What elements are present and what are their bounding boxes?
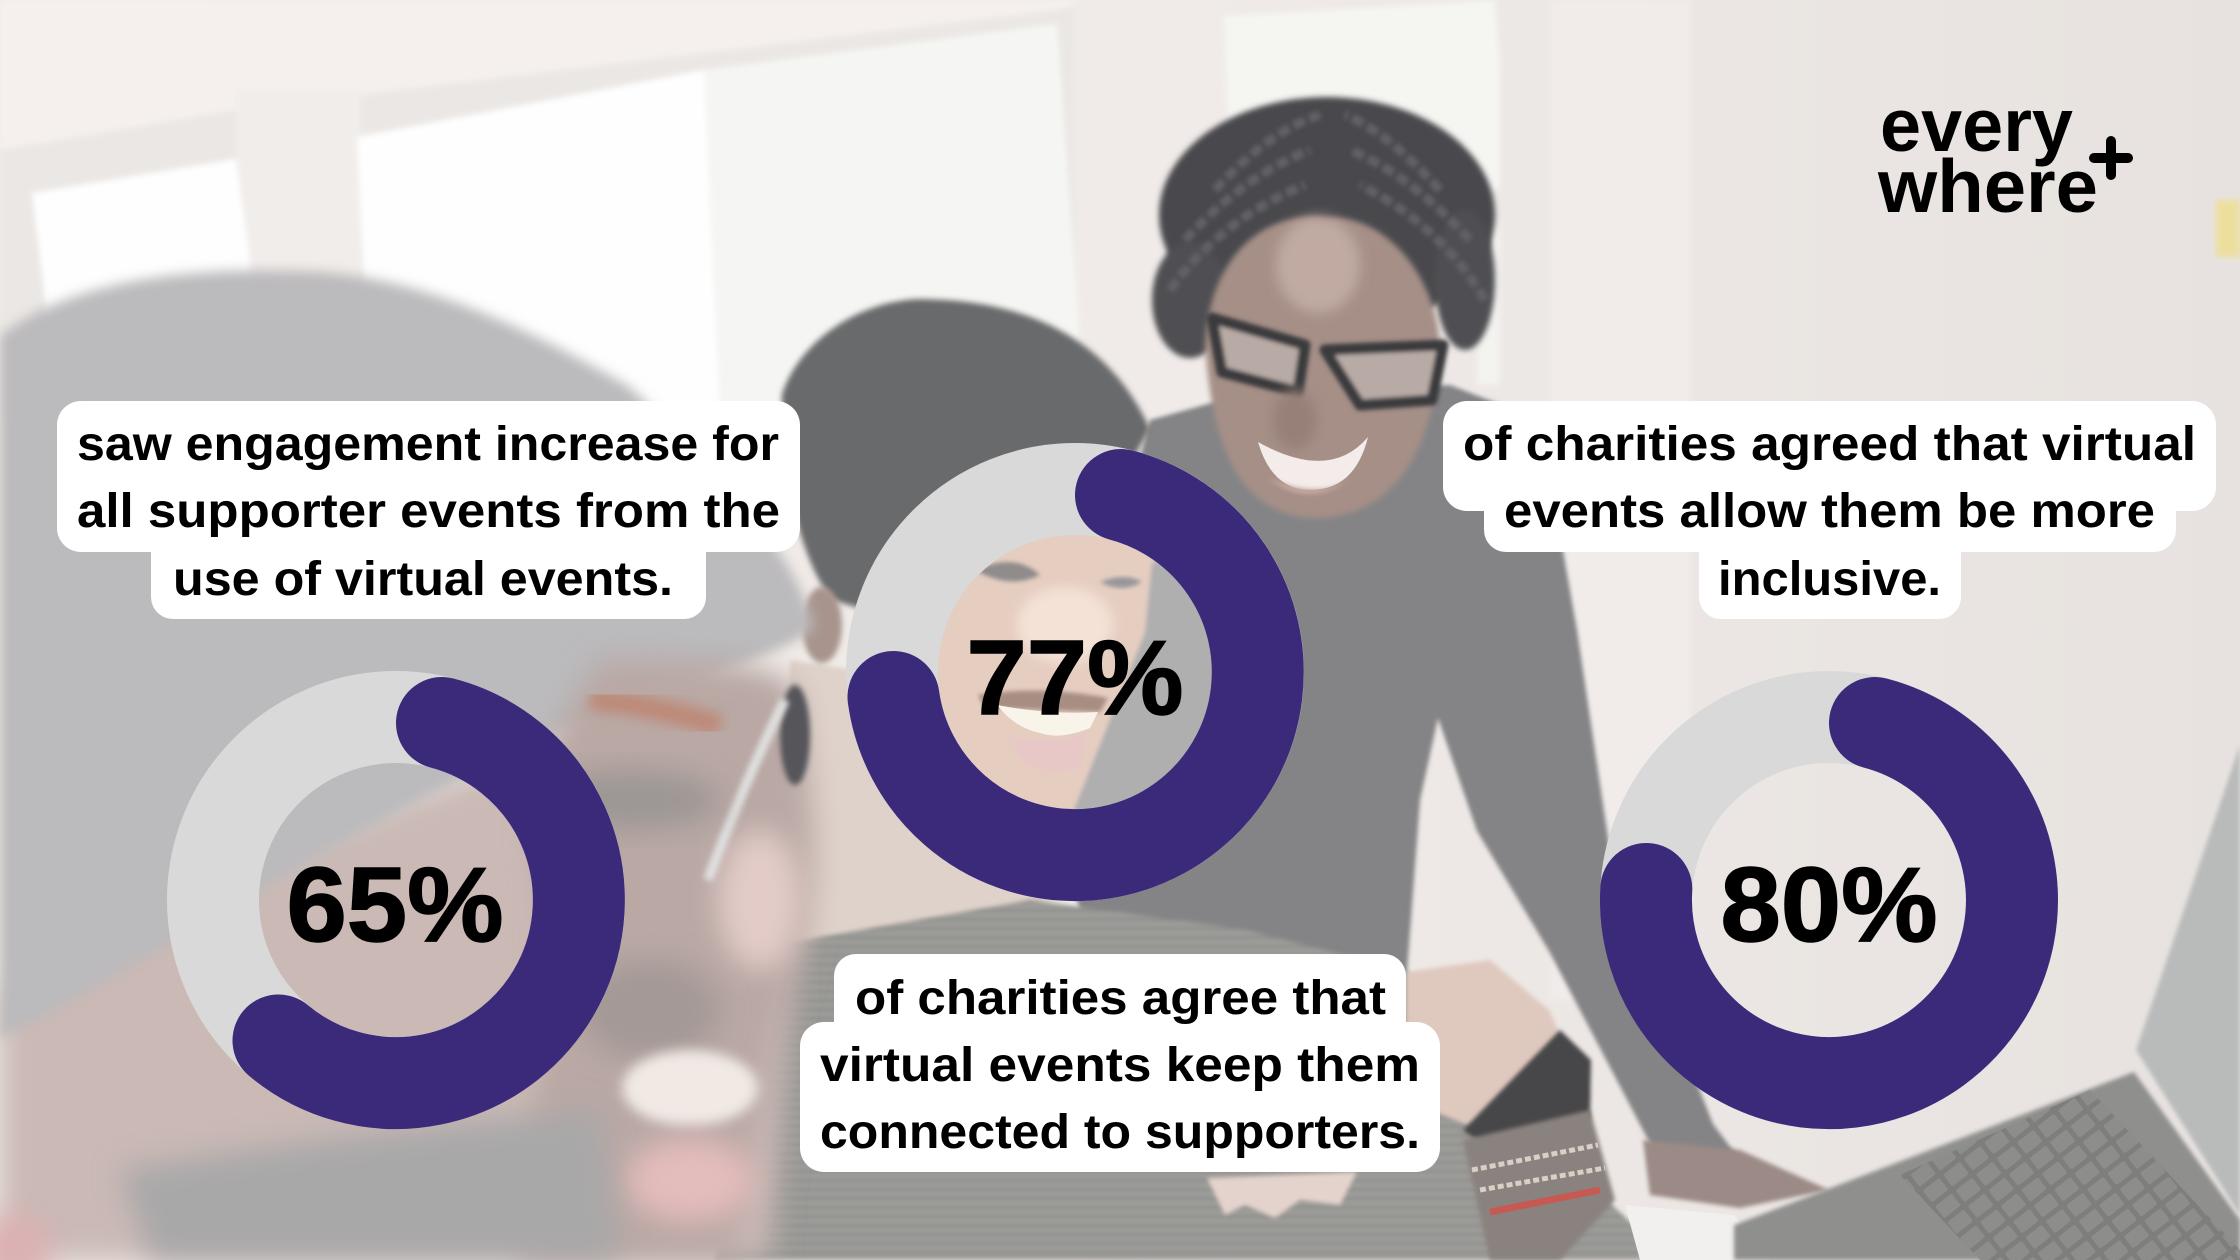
logo: everywhere+: where: [1877, 144, 2098, 228]
hair: [1159, 97, 1495, 333]
face: [0, 690, 789, 1260]
sweater and arm: [1050, 385, 1740, 1172]
ceiling and window frames: [0, 0, 2240, 1000]
callout: engagement: saw engagement increase for: [77, 418, 779, 471]
beanie: [0, 271, 814, 1040]
person: left man with beanie, blurred in the foreground: [0, 271, 814, 1260]
logo: everywhere+: [1877, 83, 2128, 228]
callout: inclusive: events allow them be more: [1504, 485, 2155, 538]
laptop: [1734, 745, 2240, 1260]
face: [915, 525, 1215, 835]
callout: connected to supporters: connected to supporters.: [820, 1106, 1420, 1159]
callout: connected to supporters: virtual events keep them: [820, 1039, 1420, 1092]
callout: engagement: [57, 401, 800, 619]
donut chart: 80%: 80%: [1720, 846, 1938, 964]
person: right woman with braids: [1050, 97, 1740, 1172]
beard and teeth: [580, 960, 720, 1060]
donut chart: 77%: [892, 489, 1258, 855]
neck: [780, 660, 1060, 950]
logo: everywhere+: every: [1880, 83, 2073, 167]
glasses: [1212, 318, 1443, 405]
callout: engagement: use of virtual events.: [173, 553, 673, 606]
callout: inclusive: of charities agreed that virtual: [1463, 418, 2196, 471]
callout: inclusive: inclusive.: [1718, 553, 1941, 606]
sweater: [714, 900, 1671, 1260]
donut chart: 65%: [213, 717, 579, 1083]
hair behind glasses and temple: [780, 685, 810, 785]
hair: [782, 299, 1150, 620]
callout: connected to supporters: of charities agree that: [855, 972, 1386, 1025]
donut chart: 65%: 65%: [286, 846, 504, 964]
donut chart: 80%: [1646, 717, 2012, 1083]
hands, watch and bracelets: [1207, 960, 1829, 1260]
face: [1205, 217, 1440, 518]
callout: engagement: all supporter events from the: [77, 485, 780, 538]
callout: connected to supporters: [800, 954, 1440, 1172]
person: middle woman: [714, 299, 1671, 1260]
callout: inclusive: [1443, 401, 2216, 619]
donut chart: 77%: 77%: [966, 619, 1184, 737]
smile: [1258, 437, 1368, 490]
